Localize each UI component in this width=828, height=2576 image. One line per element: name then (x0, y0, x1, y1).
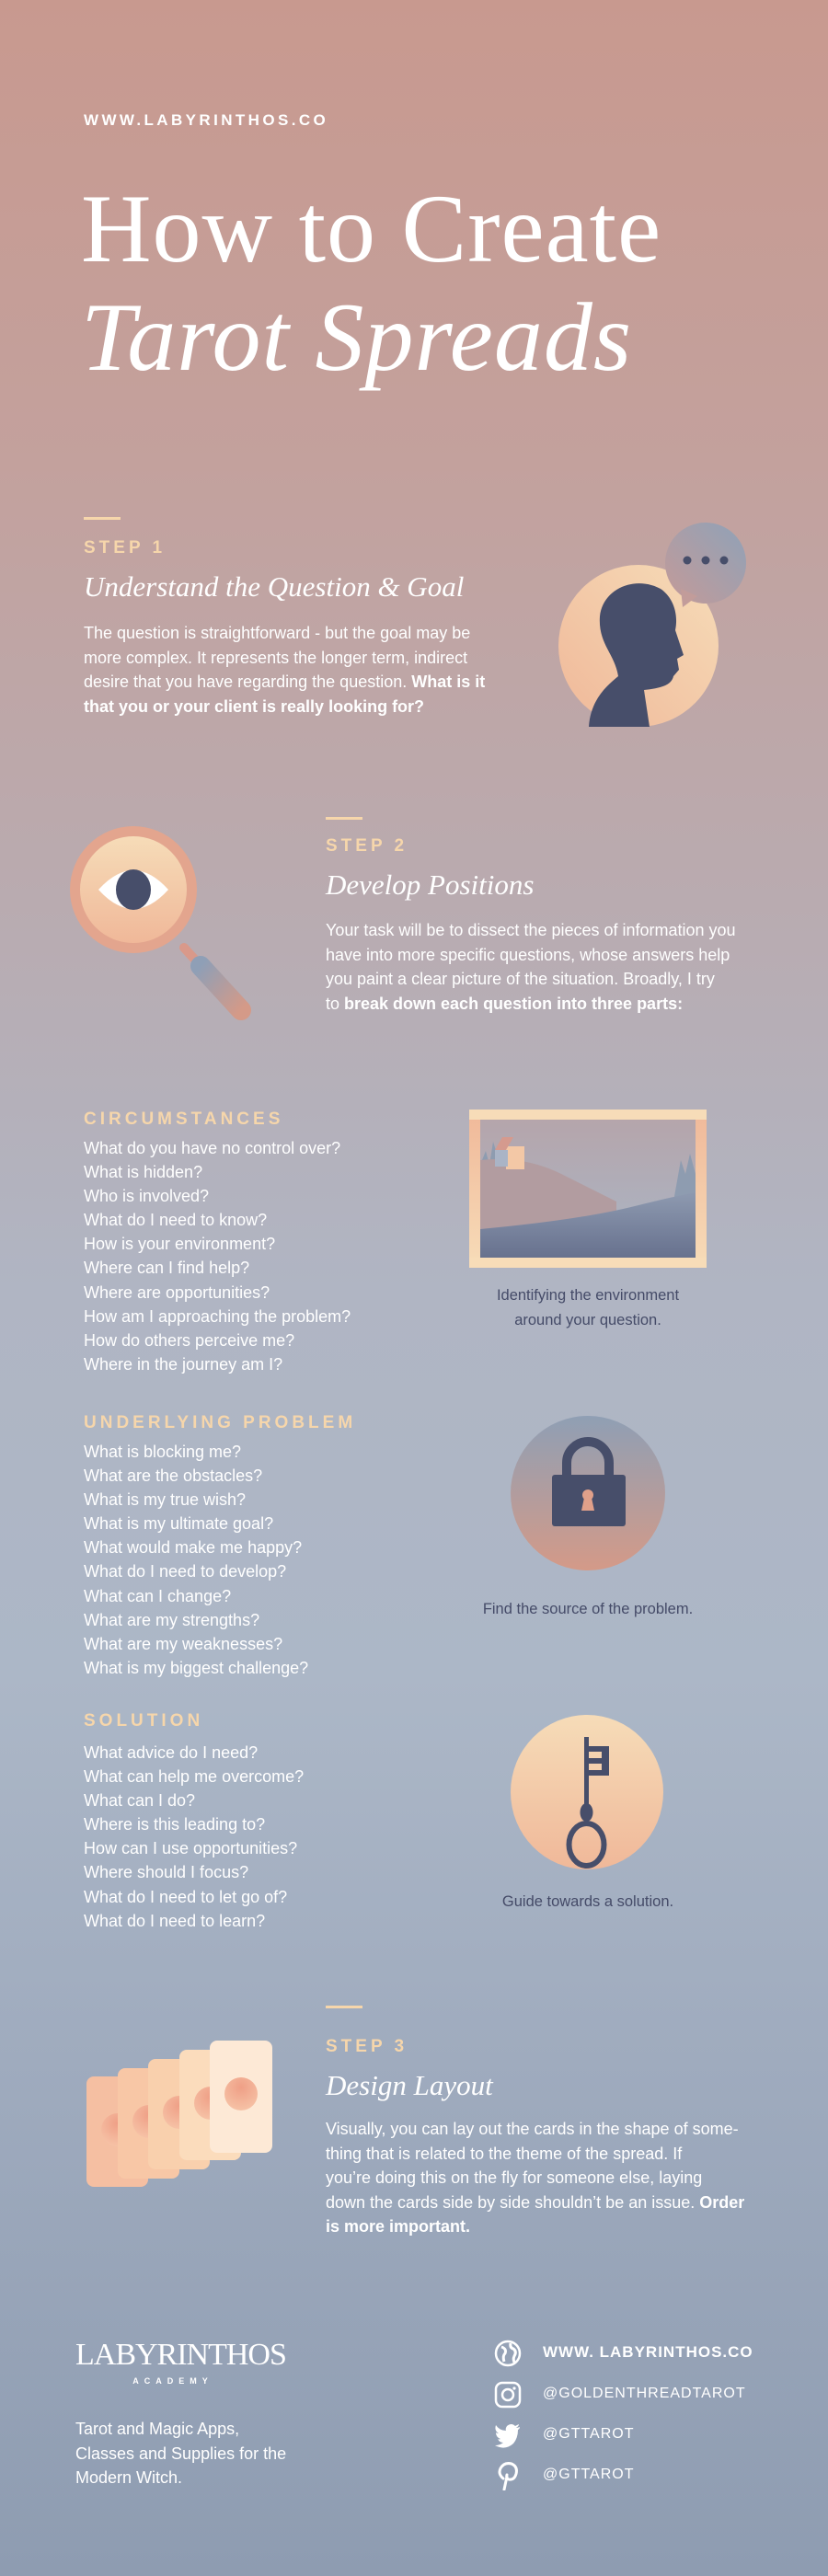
icon: magnifying glass with eye (70, 826, 251, 1020)
step 1 label: STEP 1 (84, 538, 166, 558)
step 1 text: desire that you have regarding the question. What is it (84, 673, 485, 691)
step 3 text: you’re doing this on the fly for someone else, laying (326, 2168, 702, 2187)
step 3 text: Visually, you can lay out the cards in the shape of some- (326, 2120, 739, 2138)
solution list: What can I do? (84, 1791, 195, 1810)
footer tagline: Modern Witch. (75, 2468, 182, 2487)
circumstances label: CIRCUMSTANCES (84, 1110, 283, 1129)
step 1 text: that you or your client is really looking for? (84, 697, 424, 716)
step 3 dash (326, 2006, 362, 2008)
step 3 text: is more important. (326, 2217, 470, 2236)
underlying problem list: What are my strengths? (84, 1611, 259, 1629)
social links (495, 2340, 753, 2490)
step 3 label: STEP 3 (326, 2037, 408, 2056)
step 1 dash (84, 517, 121, 520)
title (81, 175, 661, 391)
step 3 text (326, 2120, 744, 2236)
caption: environment (497, 1287, 679, 1328)
footer logo: ACADEMY (132, 2376, 213, 2386)
title: Tarot Spreads (81, 283, 632, 391)
caption: environment: Identifying the environment (497, 1287, 679, 1304)
circumstances list: How is your environment? (84, 1235, 275, 1253)
solution list: What can help me overcome? (84, 1767, 304, 1786)
social links: @GTTAROT (543, 2426, 635, 2442)
icon: key (511, 1715, 663, 1869)
step 3 text: down the cards side by side shouldn’t be an issue. Order (326, 2193, 744, 2212)
footer tagline: Classes and Supplies for the (75, 2444, 286, 2462)
icon: twitter (495, 2424, 520, 2448)
circumstances list: What is hidden? (84, 1163, 202, 1181)
step 1 text (84, 624, 485, 716)
underlying problem list: What is my ultimate goal? (84, 1514, 273, 1533)
icon: fanned tarot cards (86, 2041, 272, 2187)
step 3 text: thing that is related to the theme of the spread. If (326, 2144, 682, 2162)
underlying problem list: What is my true wish? (84, 1490, 246, 1509)
solution list: Where should I focus? (84, 1863, 248, 1881)
circumstances list: How am I approaching the problem? (84, 1307, 351, 1326)
step 1 heading: Understand the Question & Goal (84, 570, 464, 603)
underlying problem list: What is blocking me? (84, 1443, 241, 1461)
step 1 text: more complex. It represents the longer term, indirect (84, 648, 467, 666)
step 2 label: STEP 2 (326, 836, 408, 856)
solution list: How can I use opportunities? (84, 1839, 297, 1857)
footer tagline (75, 2420, 286, 2487)
solution list (84, 1743, 304, 1930)
circumstances list: Who is involved? (84, 1187, 209, 1205)
icon: globe (495, 2340, 521, 2366)
icon: pinterest (499, 2462, 518, 2490)
circumstances list: What do you have no control over? (84, 1139, 340, 1157)
underlying problem list: What would make me happy? (84, 1538, 302, 1557)
solution list: Where is this leading to? (84, 1815, 265, 1834)
underlying problem list: What are the obstacles? (84, 1466, 262, 1485)
step 3 heading: Design Layout (326, 2069, 493, 2101)
solution label: SOLUTION (84, 1711, 203, 1731)
circumstances list: Where are opportunities? (84, 1283, 270, 1302)
icon: instagram (495, 2381, 521, 2409)
solution list: What do I need to let go of? (84, 1888, 287, 1906)
step 2 text (326, 921, 736, 1013)
social links: @GOLDENTHREADTAROT (543, 2386, 746, 2401)
icon: framed landscape (469, 1110, 707, 1268)
caption: environment: around your question. (514, 1312, 661, 1328)
caption: solution: Guide towards a solution. (502, 1893, 673, 1910)
caption: source: Find the source of the problem. (483, 1601, 693, 1617)
solution list: What advice do I need? (84, 1743, 258, 1762)
underlying problem list (84, 1443, 308, 1677)
underlying problem list: What can I change? (84, 1587, 231, 1605)
underlying problem list: What is my biggest challenge? (84, 1659, 308, 1677)
footer logo: LABYRINTHOS (75, 2338, 286, 2372)
title: How to Create (81, 175, 661, 282)
circumstances list: How do others perceive me? (84, 1331, 294, 1350)
circumstances list (84, 1139, 351, 1374)
step 2 text: have into more specific questions, whose answers help (326, 946, 730, 964)
circumstances list: Where in the journey am I? (84, 1355, 282, 1374)
step 2 text: Your task will be to dissect the pieces of information you (326, 921, 736, 939)
icon: head with speech bubble (558, 523, 746, 727)
solution list: What do I need to learn? (84, 1912, 265, 1930)
step 2 text: to break down each question into three parts: (326, 994, 683, 1012)
step 2 text: you paint a clear picture of the situation. Broadly, I try (326, 970, 715, 988)
circumstances list: What do I need to know? (84, 1211, 267, 1229)
underlying problem list: What do I need to develop? (84, 1562, 286, 1581)
step 2 heading: Develop Positions (326, 868, 534, 901)
step 2 dash (326, 817, 362, 820)
step 1 text: The question is straightforward - but the goal may be (84, 624, 470, 642)
footer tagline: Tarot and Magic Apps, (75, 2420, 239, 2438)
social links: WWW. LABYRINTHOS.CO (543, 2343, 753, 2361)
underlying problem list: What are my weaknesses? (84, 1635, 282, 1653)
social links: @GTTAROT (543, 2467, 635, 2482)
icon: padlock (511, 1416, 665, 1570)
underlying problem label: UNDERLYING PROBLEM (84, 1413, 356, 1432)
circumstances list: Where can I find help? (84, 1259, 249, 1277)
website url: WWW.LABYRINTHOS.CO (84, 111, 328, 129)
